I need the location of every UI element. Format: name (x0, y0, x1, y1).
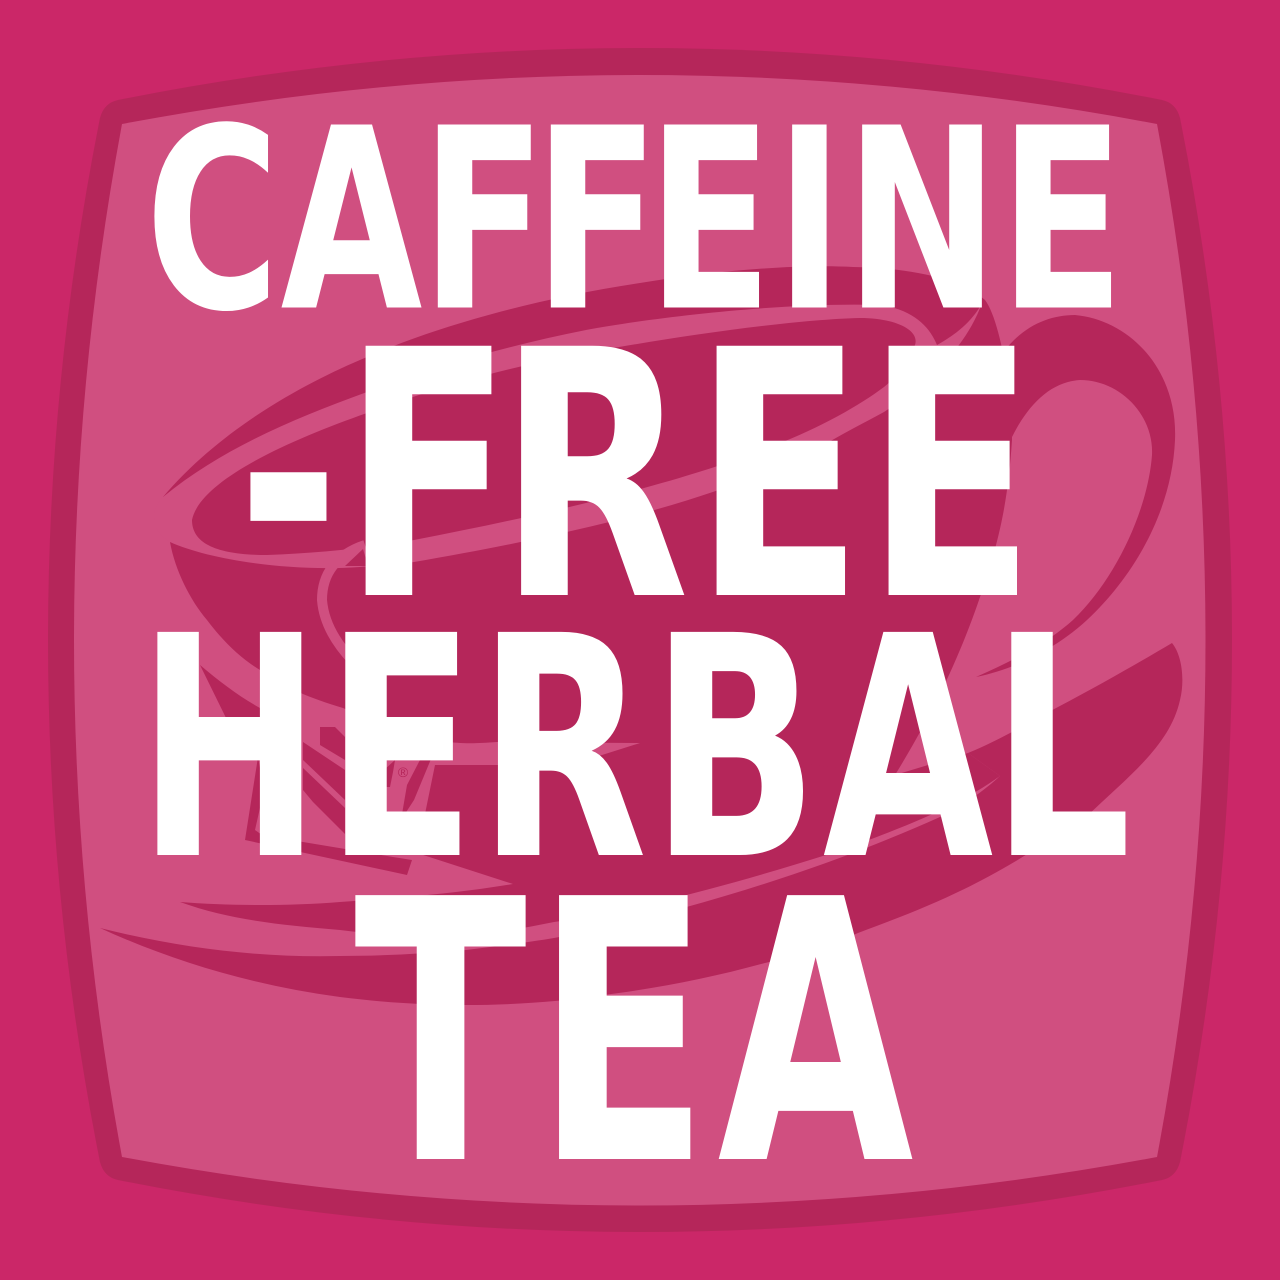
title line: -FREE: -FREE (237, 279, 1035, 676)
title line: CAFFEINE: CAFFEINE (145, 74, 1124, 367)
handle curl (322, 545, 365, 660)
curl sliver (345, 549, 368, 566)
tea bag (245, 717, 445, 875)
saucer (100, 643, 1182, 1005)
badge inner panel (74, 75, 1206, 1206)
cup handle (976, 315, 1175, 677)
registered mark: ® (398, 764, 409, 780)
title line: HERBAL: HERBAL (137, 572, 1131, 927)
shadow under cup (180, 743, 1000, 936)
cup rim light ring (154, 303, 982, 568)
tea surface (192, 318, 916, 555)
title (137, 74, 1131, 1245)
title line: TEA: TEA (354, 823, 915, 1245)
lower bowl band (200, 665, 262, 722)
cup body and rim (163, 266, 1012, 800)
icon: tea cup and saucer (100, 266, 1182, 1005)
